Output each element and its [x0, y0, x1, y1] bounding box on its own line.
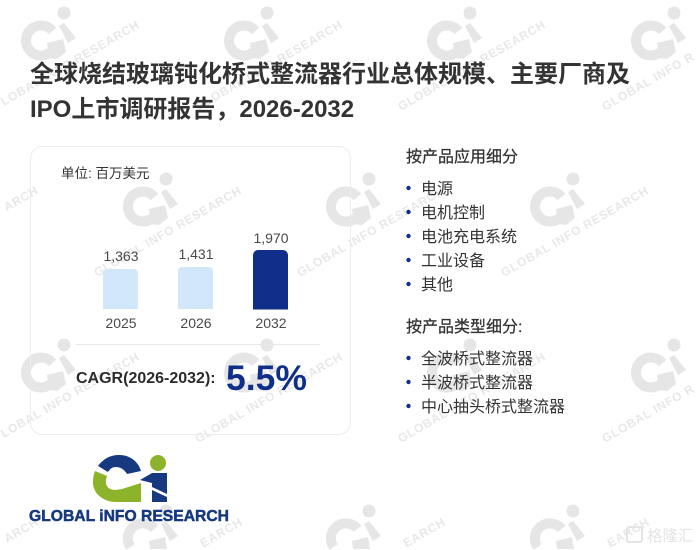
panel: application segments: 工业设备 [421, 252, 485, 270]
panel: application segments: 按产品应用细分 [406, 147, 518, 166]
CAGR callout: CAGR(2026-2032): [76, 370, 216, 387]
watermark pattern: GLOBAL INFO RESEARCH [92, 183, 244, 280]
bar chart: 1,970 [253, 230, 289, 246]
watermark pattern: EARCH [198, 515, 245, 550]
watermark pattern: EARCH [605, 515, 652, 550]
watermark pattern: GLOBAL INFO RESEARCH [294, 183, 447, 280]
panel: market size card [30, 146, 350, 434]
bar chart [103, 230, 289, 331]
bar chart: 1,431 [178, 246, 214, 262]
panel: application segments: 电源 [421, 180, 453, 198]
watermark: source badge: 格隆汇 [647, 527, 694, 545]
watermark pattern: GLOBAL INFO R [600, 381, 697, 446]
watermark pattern: ARCH [1, 183, 41, 214]
panel: application segments: 其他 [421, 276, 453, 294]
panel: application segments [406, 147, 518, 294]
CAGR callout: 5.5% [226, 358, 307, 398]
logo: Global Info Research: GLOBAL iNFO RESEARCH [29, 508, 229, 525]
watermark pattern: GLOBAL INFO RESEARCH [396, 17, 548, 114]
panel: application segments: 电机控制 [421, 204, 485, 222]
panel: product type segments: 按产品类型细分: [406, 318, 522, 336]
panel: product type segments: 中心抽头桥式整流器 [421, 398, 565, 416]
watermark pattern: LOBAL INFO RESEARCH [0, 349, 142, 441]
watermark pattern: GLOBAL INFO RESEARCH [192, 17, 345, 114]
panel: application segments: 电池充电系统 [421, 228, 517, 246]
unit label: 单位: 百万美元 [61, 166, 150, 181]
title [30, 61, 630, 123]
panel: product type segments [406, 318, 565, 416]
watermark pattern: GLOBAL INFO RESEARCH [396, 349, 548, 446]
bar chart: 2025 [105, 315, 137, 331]
bar chart: 2026 [180, 315, 212, 331]
CAGR callout [76, 358, 307, 398]
panel: product type segments: 半波桥式整流器 [421, 374, 533, 392]
title: 全球烧结玻璃钝化桥式整流器行业总体规模、主要厂商及 [30, 61, 630, 88]
watermark pattern: GLOBAL INFO RESEARCH [498, 183, 651, 280]
watermark: source badge [627, 527, 694, 545]
watermark pattern: GLOBAL INFO RESEARCH [192, 349, 345, 446]
bar chart: 1,363 [103, 248, 139, 264]
title: IPO上市调研报告，2026-2032 [30, 96, 354, 123]
watermark pattern: EARCH [401, 515, 448, 550]
watermark pattern: LOBAL INFO RESEARCH [0, 17, 142, 109]
watermark pattern: GLOBAL INFO R [600, 49, 697, 114]
bar chart: 2032 [255, 315, 287, 331]
watermark pattern: ARCH [2, 515, 41, 546]
logo: Global Info Research [29, 455, 229, 525]
panel: product type segments: 全波桥式整流器 [421, 350, 533, 368]
